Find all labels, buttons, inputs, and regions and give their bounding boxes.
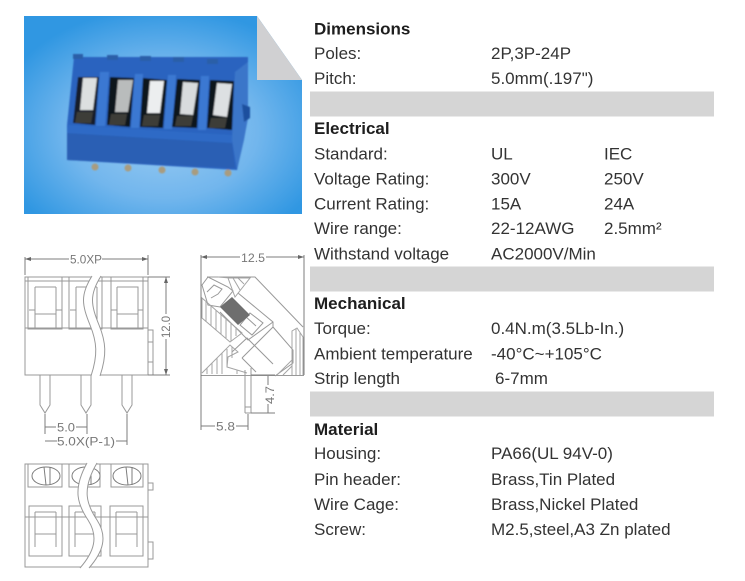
dimension 5.8: 5.8 (216, 420, 235, 434)
spec table: electrical: Standard: (314, 144, 388, 164)
spec table: material: Brass,Tin Plated (491, 470, 615, 489)
spec table: electrical: 250V (604, 170, 644, 188)
dimension 5.0x(P-1): 5.0X(P-1) (57, 434, 115, 448)
spec table: material: PA66(UL 94V-0) (491, 444, 613, 463)
wire slot 3 (140, 78, 167, 128)
spec table: dimensions: 2P,3P-24P (491, 44, 571, 63)
spec table: mechanical: Strip length (314, 369, 400, 388)
pins (40, 375, 132, 413)
page fold corner (257, 16, 302, 80)
break line (84, 276, 105, 376)
dimension 5.8 (201, 375, 248, 434)
wire slot 2 (107, 77, 134, 127)
spec table: electrical: Voltage Rating: (314, 170, 429, 188)
heading: Electrical (314, 119, 390, 138)
drawing: front view (25, 252, 173, 448)
dimension 12.5: 12.5 (241, 251, 265, 265)
panel: product photo of blue terminal block (24, 16, 302, 214)
spec table: material: M2.5,steel,A3 Zn plated (491, 520, 671, 539)
break line (78, 463, 103, 568)
wire slot 1 (73, 77, 99, 125)
spec table: mechanical: Ambient temperature (314, 344, 473, 364)
dimension 5.0x(P-1) (45, 414, 127, 448)
spec table: electrical: AC2000V/Min (491, 244, 596, 264)
spec table: dimensions: 5.0mm(.197") (491, 69, 593, 88)
spec table: electrical: Withstand voltage (314, 244, 449, 264)
dimension 12.0 (148, 277, 173, 375)
wire slot 4 (172, 79, 200, 128)
spec table: dimensions: Poles: (314, 44, 361, 63)
spec table: electrical: Wire range: (314, 219, 402, 238)
dimension 5.0xP: 5.0XP (70, 252, 102, 266)
spec table: mechanical: 0.4N.m(3.5Lb-In.) (491, 319, 624, 338)
housing outline (25, 464, 153, 567)
drawing: side view (201, 251, 304, 434)
spec table: electrical: 24A (604, 194, 635, 214)
dimension 12.0: 12.0 (159, 316, 173, 338)
solder pins (92, 164, 232, 176)
housing section (201, 277, 304, 376)
spec table: material: Screw: (314, 520, 366, 539)
spec table: electrical: 15A (491, 194, 522, 214)
spec table: electrical: IEC (604, 144, 632, 164)
spec table: electrical: UL (491, 144, 513, 164)
spec table: material: Wire Cage: (314, 495, 399, 514)
spec table: material: Housing: (314, 444, 381, 463)
spec table: mechanical: -40°C~+105°C (491, 344, 602, 364)
terminal block body (67, 54, 250, 176)
drawing: top view (25, 463, 153, 568)
dimension 4.7 (251, 375, 277, 413)
spec table: electrical: Current Rating: (314, 194, 429, 214)
heading: Mechanical (314, 294, 406, 313)
spec table: material (314, 420, 671, 539)
dimension 5.0xP (25, 252, 148, 275)
dimension 4.7: 4.7 (263, 386, 277, 404)
heading: Material (314, 420, 378, 439)
spec table: dimensions (314, 20, 593, 88)
spec table: electrical: 22-12AWG (491, 219, 574, 238)
dimension 5.0: 5.0 (57, 420, 75, 434)
section bars (310, 92, 714, 416)
spec table: material: Brass,Nickel Plated (491, 495, 638, 514)
dimension 5.0 (45, 414, 87, 434)
wire slot 5 (207, 80, 234, 130)
spec table: electrical (314, 119, 662, 264)
screw heads (32, 467, 141, 485)
spec table: electrical: 300V (491, 170, 531, 188)
spec table: mechanical: 6-7mm (495, 369, 548, 388)
spec table: material: Pin header: (314, 470, 401, 489)
housing outline (25, 277, 153, 375)
heading: Dimensions (314, 20, 410, 38)
photo background (24, 16, 302, 214)
spec table: dimensions: Pitch: (314, 69, 357, 88)
spec table: mechanical: Torque: (314, 319, 371, 338)
spec table: electrical: 2.5mm² (604, 219, 662, 238)
spec table: mechanical (314, 294, 624, 388)
pin (245, 368, 251, 413)
dimension 12.5 (201, 251, 304, 375)
